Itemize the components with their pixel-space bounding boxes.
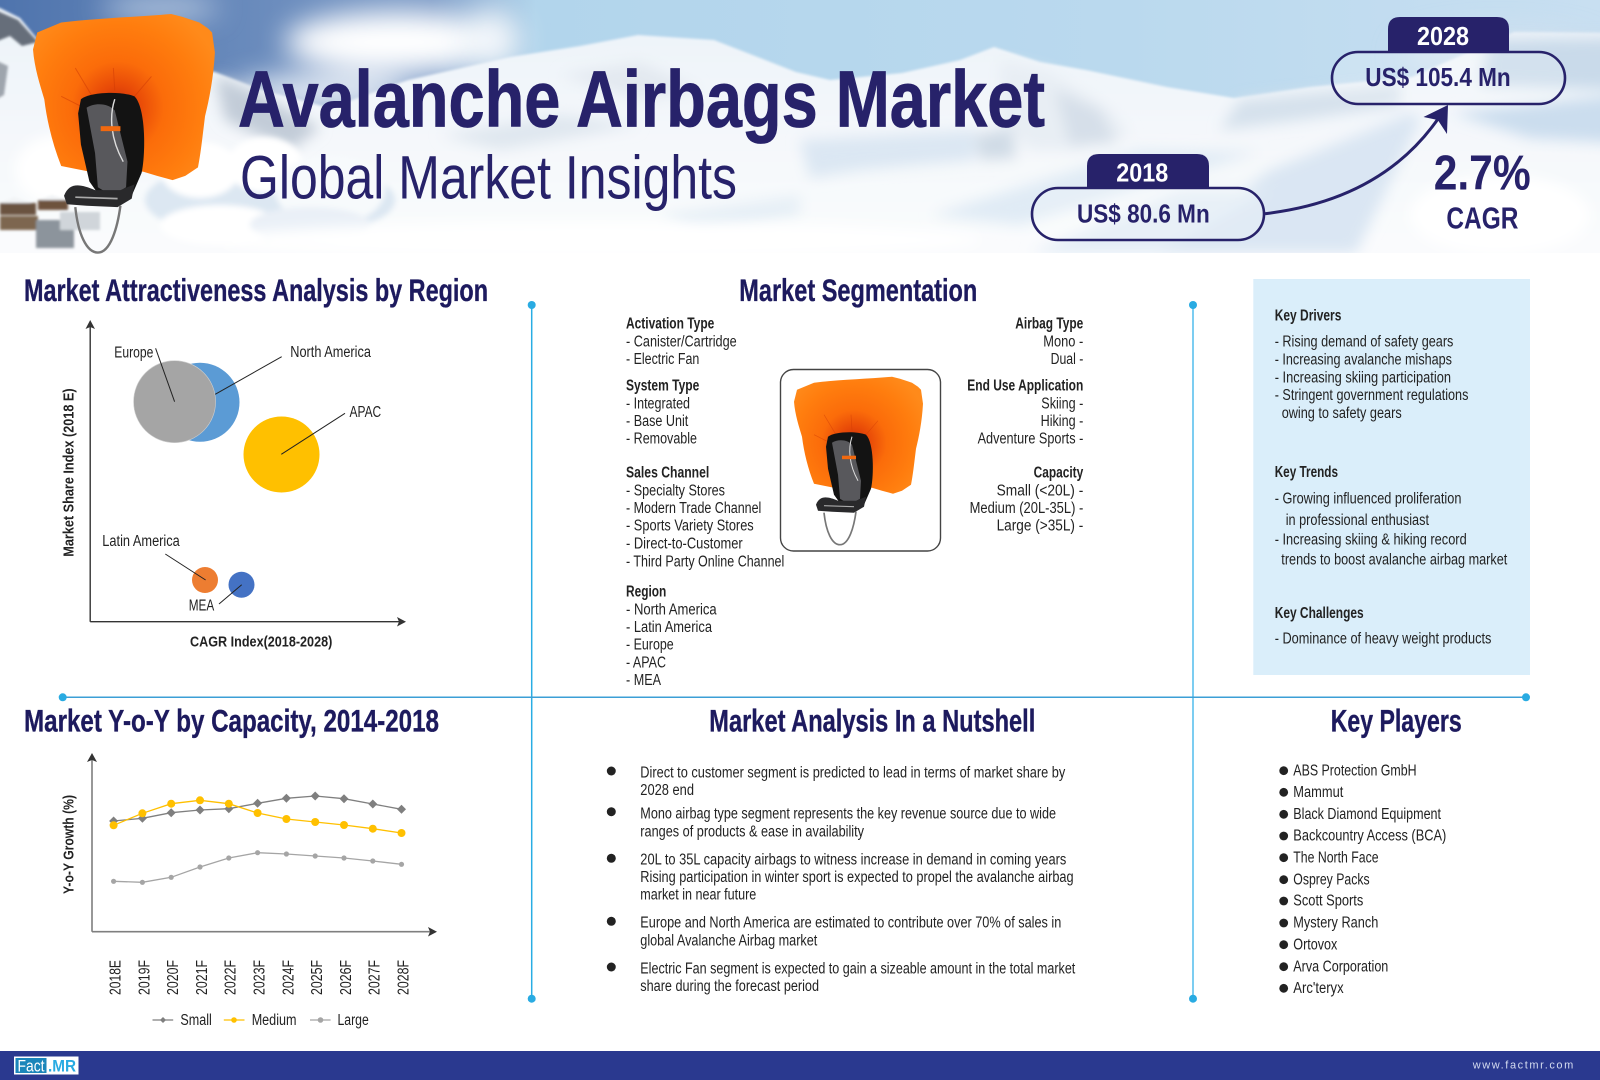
series: Small <box>109 792 406 826</box>
bubble chart: attractiveness by region: Latin America <box>102 533 180 550</box>
panel: nutshell bullet list: market in near future <box>640 887 756 904</box>
panel: segmentation right column: End Use Application <box>967 377 1083 394</box>
website url: www.factmr.com <box>1472 1059 1573 1071</box>
legend <box>152 1012 369 1029</box>
panel: key players list: Arc'teryx <box>1293 980 1344 997</box>
heading: market attractiveness: Market Attractiveness Analysis by Region <box>24 272 488 308</box>
panel: segmentation left column: - Direct-to-Customer <box>626 536 743 553</box>
panel: key drivers, trends, challenges: - Growing influenced proliferation <box>1275 490 1461 507</box>
panel: key players list: Mystery Ranch <box>1293 915 1378 932</box>
panel: segmentation left column: - Canister/Cartridge <box>626 333 737 350</box>
panel: segmentation right column: Airbag Type <box>1015 315 1084 332</box>
panel: segmentation right column: Large (>35L) - <box>997 518 1083 535</box>
panel: segmentation left column: - Electric Fan <box>626 351 699 368</box>
panel: segmentation left column: Activation Type <box>626 315 715 332</box>
avalanche powder cloud <box>144 134 396 230</box>
CAGR figure: CAGR <box>1446 200 1518 235</box>
bubble: North America <box>160 363 240 442</box>
x-axis year labels: 2020F <box>165 960 182 995</box>
panel: key players list: ABS Protection GmbH <box>1293 762 1417 779</box>
panel: key players list: Backcountry Access (BCA) <box>1293 828 1446 845</box>
panel: segmentation left column: - Removable <box>626 431 697 448</box>
bubble: MEA <box>228 572 254 598</box>
panel: segmentation left column: - North America <box>626 601 717 618</box>
panel: segmentation right column: Medium (20L-35L) - <box>970 500 1083 517</box>
panel: segmentation left column: - Sports Variety Stores <box>626 518 754 535</box>
panel: segmentation right column: Dual - <box>1051 351 1083 368</box>
x-axis year labels: 2018E <box>108 960 124 995</box>
line chart: Y-o-Y growth by capacity: Y-o-Y Growth (%) <box>61 795 78 894</box>
header banner: snowy mountain background <box>0 0 1600 290</box>
panel: segmentation left column: - Latin America <box>626 619 712 636</box>
panel: segmentation left column: Region <box>626 583 666 600</box>
panel: nutshell bullet list: Direct to customer segment is predicted to lead in terms of market share by <box>640 764 1065 781</box>
bubble: APAC <box>244 416 320 492</box>
panel: segmentation right column: Small (<20L) - <box>997 482 1083 499</box>
x-axis year labels: 2021F <box>194 960 211 995</box>
panel: key players list: Mammut <box>1293 784 1344 801</box>
panel: key drivers, trends, challenges: Key Drivers <box>1275 308 1341 325</box>
panel: nutshell bullet list: Mono airbag type segment represents the key revenue source due to wide <box>640 806 1056 823</box>
panel: key players list: Ortovox <box>1293 936 1338 953</box>
panel: nutshell bullet list <box>607 764 1076 995</box>
x-axis year labels: 2027F <box>367 960 384 995</box>
rock at upper left <box>0 10 38 100</box>
chalets <box>0 195 100 248</box>
panel: segmentation right column: Hiking - <box>1041 413 1083 430</box>
icon: airbag product box <box>780 370 940 551</box>
CAGR figure <box>1434 146 1531 235</box>
x-axis year labels <box>108 960 412 995</box>
dividers <box>59 301 1530 1003</box>
callout: 2018 market value <box>1032 154 1264 240</box>
bubble chart: attractiveness by region: Market Share Index (2018 E) <box>61 388 78 557</box>
title: Avalanche Airbags Market <box>238 55 1045 144</box>
panel: key drivers, trends, challenges: Key Challenges <box>1275 605 1364 622</box>
panel: nutshell bullet list: Rising participation in winter sport is expected to propel the avalanche airbag <box>640 869 1074 886</box>
heading: year-on-year: Market Y-o-Y by Capacity, 2014-2018 <box>24 703 439 739</box>
bubble chart: attractiveness by region: MEA <box>189 598 215 615</box>
heading: market segmentation: Market Segmentation <box>739 272 977 308</box>
heading: key players: Key Players <box>1331 703 1462 739</box>
panel: key drivers, trends, challenges: Key Trends <box>1275 464 1338 481</box>
x-axis year labels: 2028F <box>396 960 412 995</box>
x-axis year labels: 2022F <box>223 960 240 995</box>
panel: segmentation right column <box>967 315 1084 535</box>
panel: key drivers, trends, challenges: - Dominance of heavy weight products <box>1275 631 1492 648</box>
x-axis year labels: 2019F <box>136 960 153 995</box>
panel: key drivers, trends, challenges: trends to boost avalanche airbag market <box>1281 552 1508 569</box>
legend: Large <box>338 1012 369 1029</box>
panel: segmentation right column: Skiing - <box>1041 395 1083 412</box>
callout: 2028 market value: US$ 105.4 Mn <box>1365 62 1511 92</box>
bubble: Latin America <box>192 567 218 593</box>
panel: key players list: Black Diamond Equipment <box>1293 806 1442 823</box>
CAGR figure: 2.7% <box>1434 146 1531 200</box>
panel: segmentation left column: System Type <box>626 377 700 394</box>
panel: segmentation left column: - Integrated <box>626 395 690 412</box>
shadow planes <box>215 38 1600 253</box>
panel: key drivers, trends, challenges: - Stringent government regulations <box>1275 387 1469 404</box>
bubble chart: attractiveness by region: CAGR Index(2018-2028) <box>190 634 332 651</box>
panel: key drivers, trends, challenges: - Rising demand of safety gears <box>1275 334 1454 351</box>
callout: 2028 market value: 2028 <box>1417 21 1469 51</box>
sunlit snow massif <box>0 6 1600 253</box>
panel: key players list: The North Face <box>1293 849 1379 866</box>
panel: key drivers, trends, challenges: owing to safety gears <box>1282 405 1402 422</box>
legend: Small <box>180 1012 212 1029</box>
panel: segmentation right column: Adventure Sports - <box>978 431 1083 448</box>
bubble chart: attractiveness by region <box>61 320 406 651</box>
panel: key drivers, trends, challenges: - Increasing skiing participation <box>1275 369 1451 386</box>
panel: key drivers, trends, challenges: - Increasing skiing & hiking record <box>1275 532 1467 549</box>
line chart: Y-o-Y growth by capacity <box>61 753 437 1029</box>
x-axis year labels: 2025F <box>309 960 326 995</box>
panel: nutshell bullet list: ranges of products & ease in availability <box>640 823 864 840</box>
x-axis year labels: 2023F <box>252 960 268 995</box>
panel: segmentation right column: Mono - <box>1043 333 1083 350</box>
callout: 2018 market value: 2018 <box>1116 158 1168 188</box>
callout: 2028 market value <box>1332 17 1565 104</box>
logo: Fact.MR <box>14 1056 78 1076</box>
legend: Medium <box>252 1012 296 1029</box>
panel: key drivers, trends, challenges: in professional enthusiast <box>1286 512 1430 529</box>
panel: key players list: Osprey Packs <box>1293 871 1370 888</box>
panel: key players list: Arva Corporation <box>1293 958 1388 975</box>
x-axis year labels: 2026F <box>338 960 355 995</box>
bubble chart: attractiveness by region: Europe <box>114 344 153 361</box>
panel: nutshell bullet list: share during the forecast period <box>640 978 819 995</box>
bubble: Europe <box>134 361 216 443</box>
logo: Fact.MR: .MR <box>48 1056 76 1076</box>
panel: key players list <box>1279 762 1446 997</box>
panel: nutshell bullet list: 2028 end <box>640 782 694 799</box>
icon: airbag backpack in header <box>33 14 215 253</box>
panel: nutshell bullet list: 20L to 35L capacity airbags to witness increase in demand in coming years <box>640 851 1066 868</box>
panel: key drivers, trends, challenges <box>1253 279 1530 675</box>
panel: key drivers, trends, challenges: - Increasing avalanche mishaps <box>1275 351 1452 368</box>
callout: 2018 market value: US$ 80.6 Mn <box>1077 199 1210 229</box>
panel: segmentation left column: - APAC <box>626 654 666 671</box>
logo: Fact.MR: Fact <box>18 1056 45 1076</box>
subtitle: Global Market Insights <box>240 143 737 211</box>
panel: segmentation left column: Sales Channel <box>626 464 709 481</box>
panel: nutshell bullet list: global Avalanche Airbag market <box>640 933 818 950</box>
panel: nutshell bullet list: Electric Fan segment is expected to gain a sizeable amount in the total market <box>640 960 1076 977</box>
heading: market analysis: Market Analysis In a Nutshell <box>709 703 1035 739</box>
panel: segmentation left column: - Specialty Stores <box>626 482 725 499</box>
panel: segmentation left column: - Europe <box>626 637 674 654</box>
x-axis year labels: 2024F <box>280 960 297 995</box>
panel: segmentation left column: - Third Party Online Channel <box>626 553 784 570</box>
panel: nutshell bullet list: Europe and North America are estimated to contribute over 70% of sales in <box>640 915 1061 932</box>
bubble chart: attractiveness by region: APAC <box>350 404 381 421</box>
panel: segmentation left column: - Modern Trade Channel <box>626 500 761 517</box>
panel: segmentation left column: - MEA <box>626 672 662 689</box>
panel: key players list: Scott Sports <box>1293 893 1363 910</box>
panel: segmentation left column <box>626 315 784 689</box>
panel: segmentation right column: Capacity <box>1034 464 1084 481</box>
panel: segmentation left column: - Base Unit <box>626 413 689 430</box>
series: Large <box>111 850 404 885</box>
series: Medium <box>110 796 405 837</box>
bubble chart: attractiveness by region: North America <box>290 344 371 361</box>
footer bar <box>0 1051 1600 1080</box>
arrow: growth from 2018 to 2028 <box>1265 105 1448 214</box>
